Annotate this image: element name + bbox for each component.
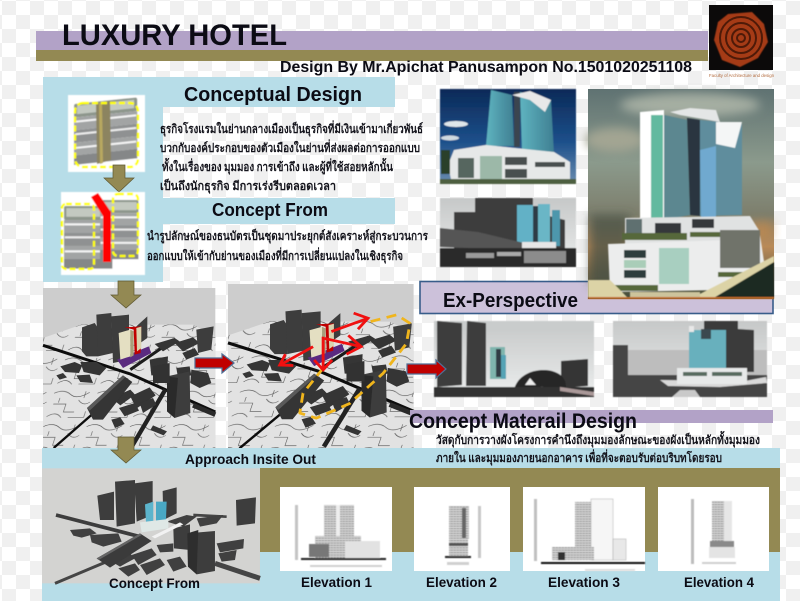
heading: ex-perspective: Ex-Perspective: [443, 290, 578, 312]
panel: ex-perspective: [420, 282, 773, 314]
heading: concept from: Concept From: [212, 200, 328, 220]
elevation 4: [658, 487, 769, 590]
elevation 2: [414, 487, 510, 590]
text block: concept from description: [147, 228, 428, 264]
render: across the road view: [613, 321, 767, 397]
elevation 3: [523, 487, 645, 590]
text block: conceptual description: เป็นถึงนักธุรกิจ มีการเร่งรีบตลอดเวลา: [160, 178, 336, 194]
image: split money stack: [61, 192, 145, 275]
logo caption: Faculty of Architecture and design: [709, 73, 774, 78]
designer credit: Design By Mr.Apichat Panusampon No.1501020251108: [280, 59, 692, 76]
arrow: money to split money: [104, 165, 134, 192]
heading: conceptual design: Conceptual Design: [184, 84, 362, 106]
label: elevation 2: Elevation 2: [426, 574, 497, 590]
logo: faculty of architecture: [709, 5, 774, 78]
render: main hotel tower: [585, 89, 774, 299]
text block: conceptual description: [160, 120, 423, 194]
image: massing model with circulation: [228, 284, 414, 448]
arrow: down to map: [111, 281, 141, 308]
panel: conceptual design: [43, 77, 395, 282]
elevation 1: [280, 487, 392, 590]
image: concept model aerial: [42, 468, 260, 583]
red view arrows: [280, 313, 368, 370]
text block: material description: [436, 430, 760, 466]
arrow: to exterior views: [407, 360, 446, 378]
label: elevation 3: Elevation 3: [548, 574, 620, 590]
render: hotel with neighbouring towers: [440, 198, 576, 267]
panel: concept material design: [409, 410, 773, 433]
image: massing model: [43, 288, 215, 448]
text block: conceptual description: บวกกับองค์ประกอบของตัวเมืองในย่านที่ส่งผลต่อการออกแบบ: [160, 139, 420, 155]
title bar: [36, 31, 708, 61]
label: elevation 1: Elevation 1: [301, 574, 372, 590]
text block: concept from description: นำรูปลักษณ์ของธนบัตรเป็นชุดมาประยุกต์สังเคราะห์สู่กระบวนการ: [147, 228, 428, 244]
panel: approach band and elevations base: [42, 448, 780, 601]
text block: material description: ภายใน และมุมมองภายนอกอาคาร เพื่อที่จะตอบรับต่อบริบทโดยรอบ: [436, 449, 722, 466]
heading: concept material design: Concept Materail Design: [409, 410, 637, 433]
arrow: between models: [195, 354, 234, 373]
render: hotel against blue sky: [440, 89, 576, 184]
dashed circulation loop: [300, 315, 410, 418]
text block: conceptual description: ทั้งในเรื่องของ มุมมอง การเข้าถึง และผู้ที่ใช้สอยหลักนั้น: [162, 157, 394, 175]
text label: concept from: Concept From: [109, 575, 200, 591]
image: money stack: [68, 95, 145, 172]
label: elevation 4: Elevation 4: [684, 574, 754, 590]
arrow: down to approach: [111, 437, 141, 463]
text block: concept from description: ออกแบบให้เข้ากับย่านของเมืองที่มีการเปลี่ยนแปลงในเชิงธุรกิจ: [147, 247, 403, 264]
heading: approach insite out: Approach Insite Out: [185, 451, 316, 467]
render: street view: [434, 321, 594, 397]
title: LUXURY HOTEL: [62, 19, 287, 52]
text block: conceptual description: ธุรกิจโรงแรมในย่านกลางเมืองเป็นธุรกิจที่มีเงินเข้ามาเกี่ยวพันธ์: [160, 120, 423, 137]
